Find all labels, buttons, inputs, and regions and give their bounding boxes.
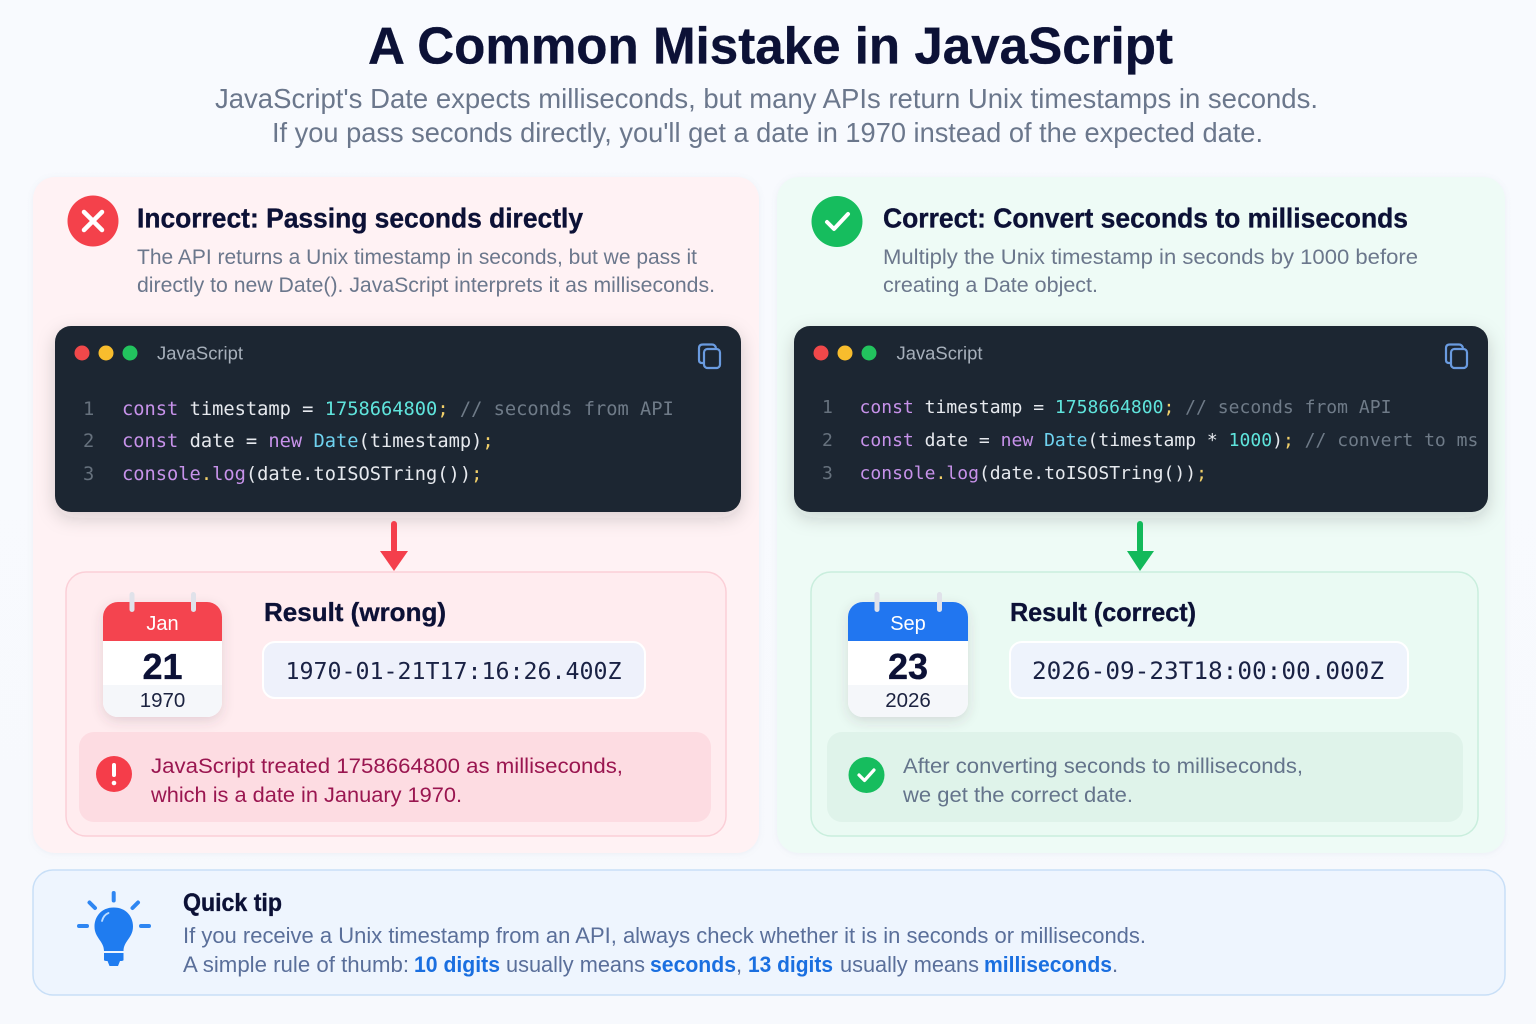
note text: wrong: JavaScript treated 1758664800 as milliseconds,: [151, 754, 623, 778]
title: A Common Mistake in JavaScript: [368, 18, 1173, 76]
panel: quick tip: [33, 870, 1505, 995]
subtitle: If you pass seconds directly, you'll get a date in 1970 instead of the expected date.: [272, 117, 1263, 148]
calendar: Jan 21 1970: 21: [142, 646, 183, 687]
icon: copy: [1446, 344, 1467, 368]
icon: check: [848, 757, 884, 793]
code lines: 1: [83, 399, 94, 420]
arrow: red down: [380, 521, 408, 571]
result heading: correct: Result (correct): [1010, 597, 1196, 627]
result value: correct: 2026-09-23T18:00:00.000Z: [1032, 656, 1384, 685]
tip text: milliseconds: [984, 952, 1112, 977]
result value: wrong: [263, 642, 645, 698]
icon: light bulb: [79, 893, 149, 966]
note: correct: [827, 732, 1463, 822]
tip text: If you receive a Unix timestamp from an API, always check whether it is in seconds or milliseconds.: [183, 923, 1146, 948]
heading: correct: Correct: Convert seconds to milliseconds: [883, 202, 1408, 234]
icon: copy: [699, 344, 720, 368]
tip text: .: [1112, 952, 1118, 977]
code lines: const date = new Date(timestamp * 1000); // convert to ms: [860, 430, 1478, 451]
panel: incorrect: [33, 177, 759, 853]
note text: correct: [902, 754, 1303, 807]
code lines: [822, 397, 1478, 484]
icon: warning: [96, 756, 132, 792]
calendar: Sep 23 2026: 2026: [885, 689, 931, 712]
code lines: 3: [83, 464, 94, 485]
code lines: 2: [822, 430, 833, 451]
note text: wrong: [150, 754, 623, 807]
result card: wrong: [66, 572, 726, 836]
tip text: usually means: [840, 952, 979, 977]
code lines: const date = new Date(timestamp);: [122, 431, 494, 452]
note: wrong: [79, 732, 711, 822]
note text: correct: After converting seconds to milliseconds,: [903, 754, 1303, 778]
result value: correct: [1010, 642, 1408, 698]
language label: JavaScript: [157, 344, 243, 364]
code lines: [83, 399, 674, 485]
result heading: wrong: Result (wrong): [264, 597, 446, 627]
code lines: const timestamp = 1758664800; // seconds from API: [122, 399, 674, 420]
panel: correct: [777, 177, 1505, 853]
tip text: A simple rule of thumb:: [183, 952, 409, 977]
code lines: 1: [822, 397, 833, 418]
tip text: seconds: [650, 952, 736, 977]
calendar: Sep 23 2026: [848, 592, 968, 717]
description: incorrect: [137, 245, 715, 297]
result card: correct: [811, 572, 1478, 836]
window dots: [74, 346, 138, 360]
tip heading: Quick tip: [183, 889, 282, 917]
code lines: const timestamp = 1758664800; // seconds from API: [860, 397, 1391, 418]
tip text: ,: [736, 952, 742, 977]
subtitle: JavaScript's Date expects milliseconds, but many APIs return Unix timestamps in seconds.: [215, 83, 1318, 114]
result value: wrong: 1970-01-21T17:16:26.400Z: [286, 658, 622, 685]
tip text: [183, 923, 1146, 977]
calendar: Jan 21 1970: Jan: [146, 613, 179, 635]
window dots: [814, 346, 876, 360]
code block: correct: [794, 326, 1488, 512]
note text: wrong: which is a date in January 1970.: [150, 783, 462, 807]
code block: incorrect: [55, 326, 741, 512]
tip text: usually means: [506, 952, 645, 977]
description: correct: Multiply the Unix timestamp in seconds by 1000 before: [883, 245, 1418, 269]
calendar: Jan 21 1970: 1970: [140, 689, 185, 712]
calendar: Sep 23 2026: 23: [888, 646, 928, 687]
tip text: 10 digits: [414, 952, 500, 977]
description: incorrect: The API returns a Unix timestamp in seconds, but we pass it: [137, 245, 697, 269]
description: correct: creating a Date object.: [883, 273, 1098, 297]
code lines: 3: [822, 463, 833, 484]
code lines: 2: [83, 431, 94, 452]
code lines: console.log(date.toISOSTring());: [860, 463, 1207, 484]
subtitle: [215, 83, 1318, 148]
description: incorrect: directly to new Date(). JavaScript interprets it as milliseconds.: [137, 273, 715, 297]
calendar: Sep 23 2026: Sep: [890, 613, 926, 635]
icon: green check: [812, 196, 862, 247]
tip text: 13 digits: [748, 952, 833, 977]
icon: red cross: [68, 196, 118, 246]
calendar: Jan 21 1970: [103, 592, 222, 717]
note text: correct: we get the correct date.: [902, 783, 1133, 807]
arrow: green down: [1127, 521, 1154, 571]
heading: incorrect: Incorrect: Passing seconds directly: [137, 202, 583, 234]
code lines: console.log(date.toISOSTring());: [122, 464, 482, 485]
description: correct: [883, 245, 1418, 297]
language label: JavaScript: [896, 344, 982, 364]
